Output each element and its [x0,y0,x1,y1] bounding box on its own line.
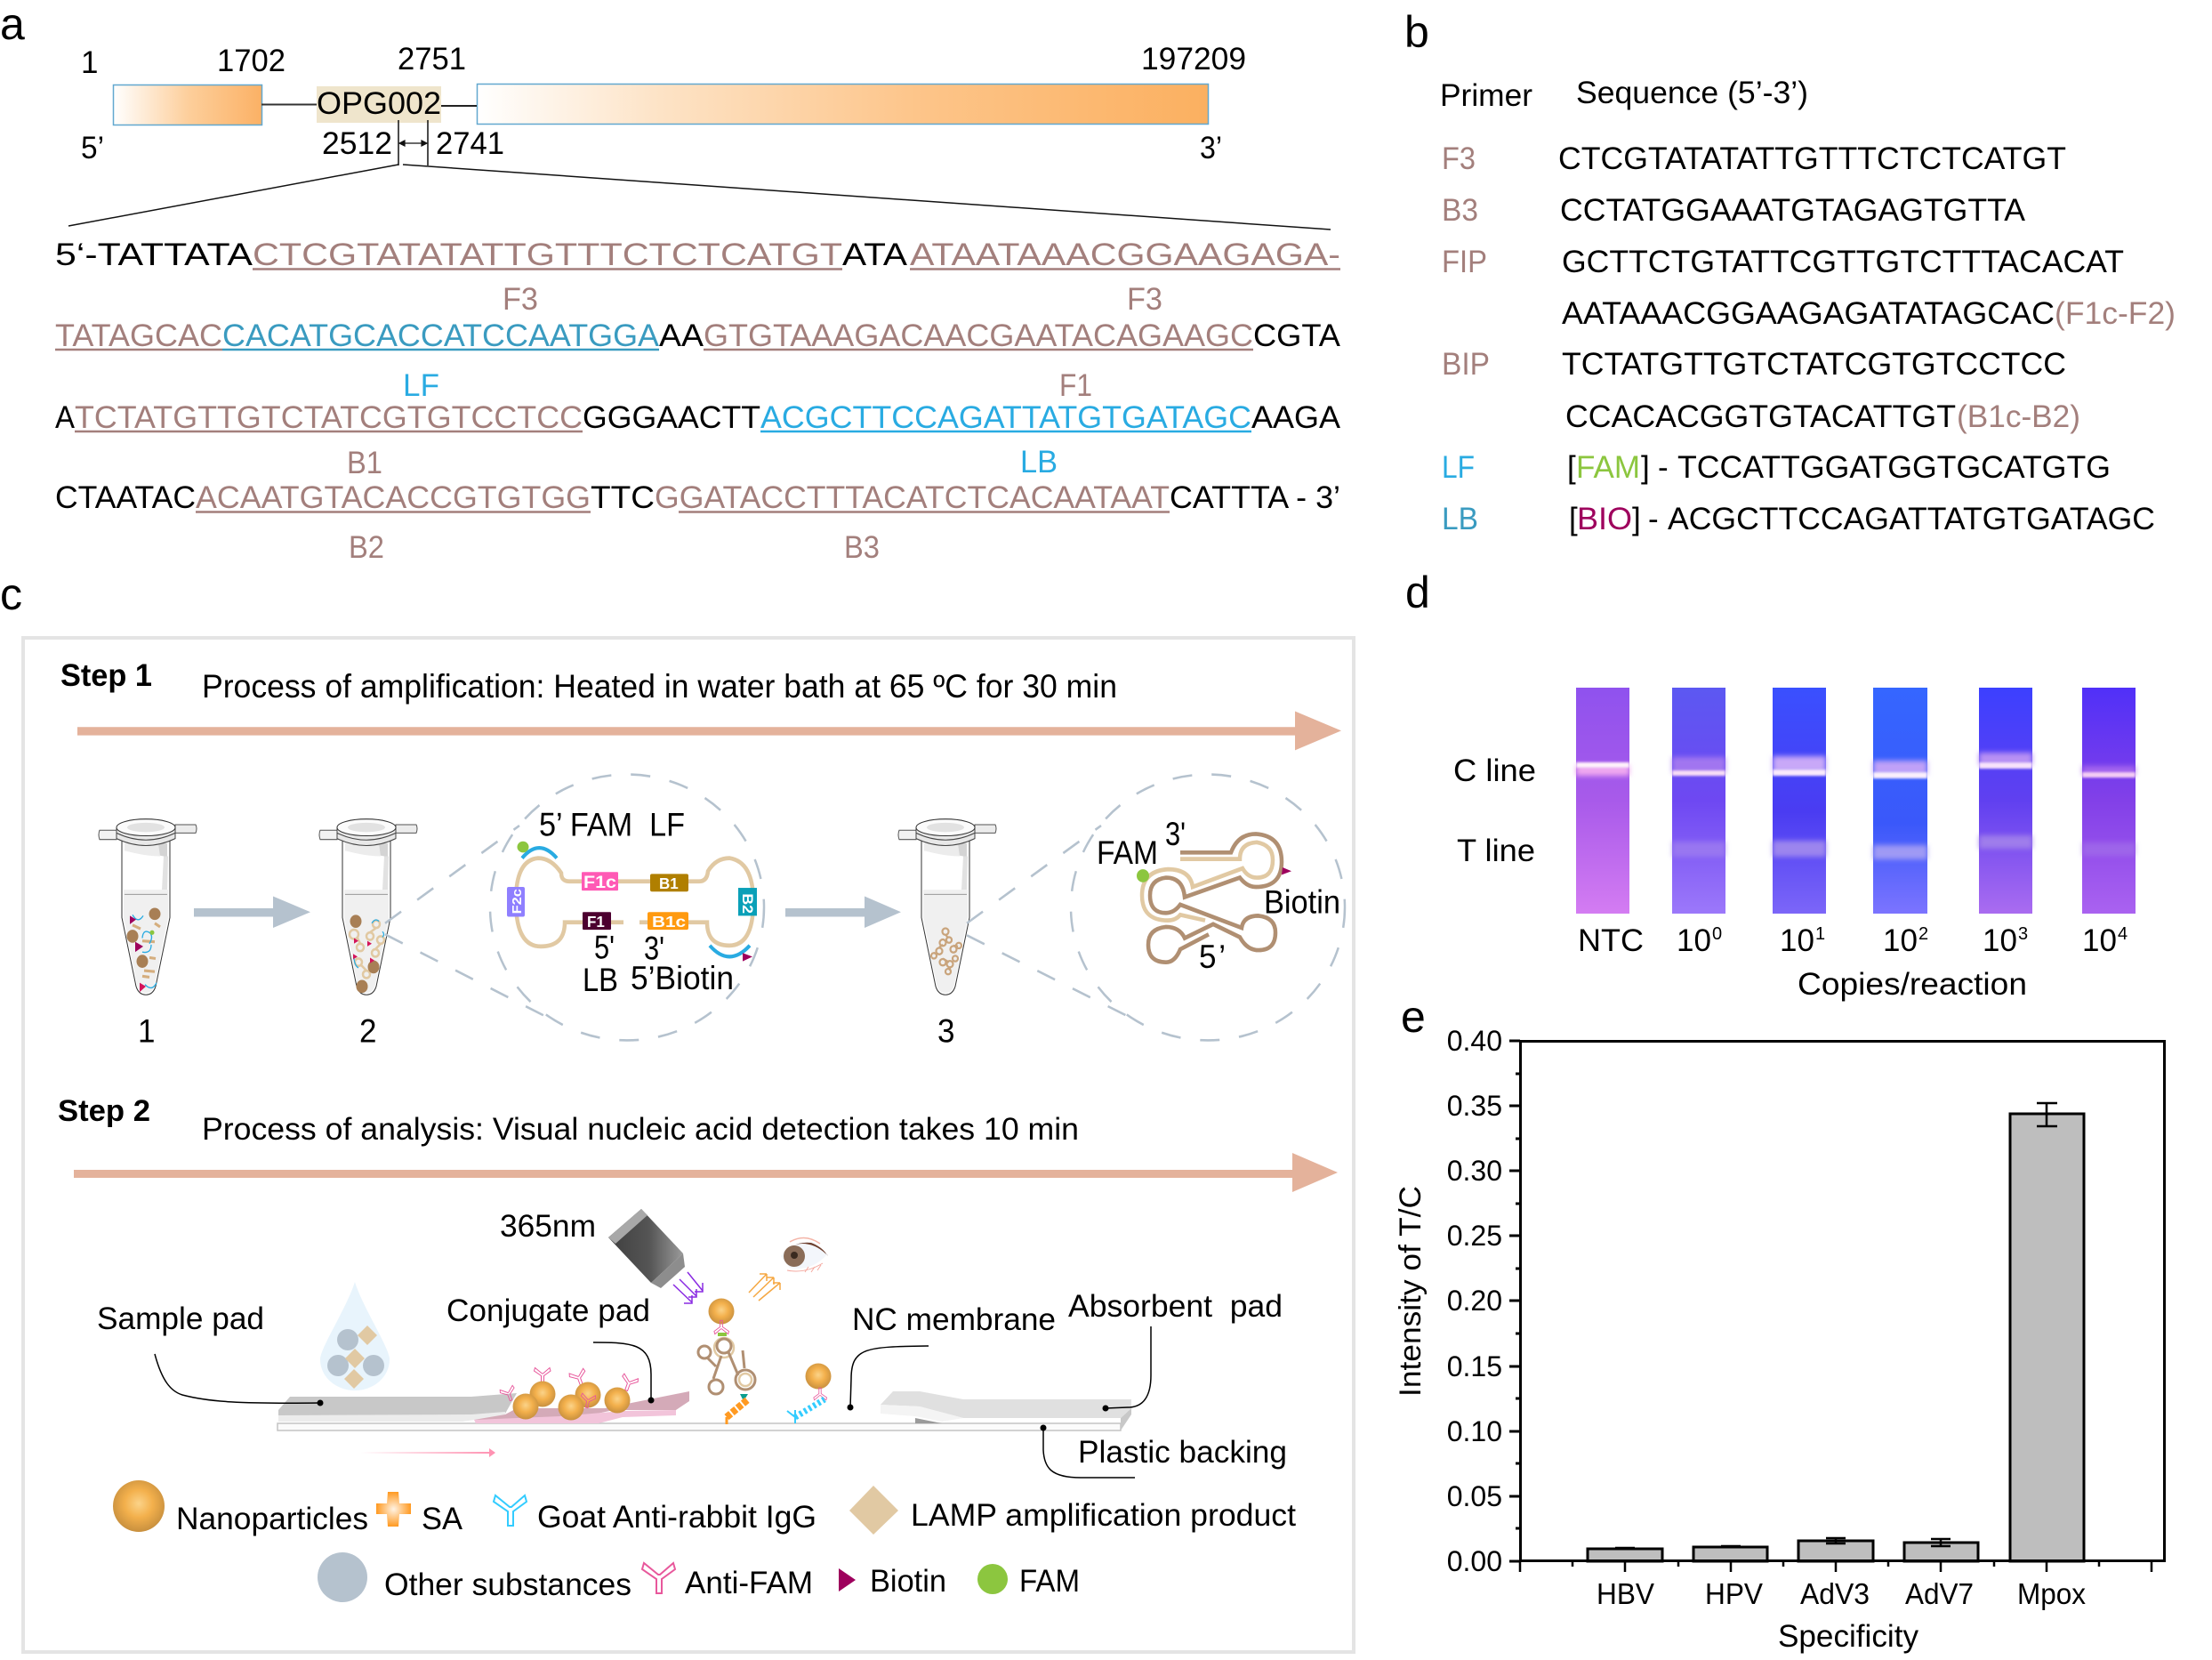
absorbent pad [881,1391,1131,1430]
tube 2 [319,819,417,995]
row BIP: CCACACGGTGTACATTGT [1565,399,1956,434]
row LF: TCCATTGGATGGTGCATGTG [1677,450,2111,485]
legend: other substances [318,1552,631,1602]
strip labels: 10 [2082,923,2117,958]
sample pad [278,1393,517,1422]
sequence line 4: ACAATGTACACCGTGTGG [196,480,591,515]
row LB: - [1648,502,1659,536]
tube 3 [898,819,996,995]
primer labels LF, F1: F1 [1059,368,1092,403]
sequence line 2: TATAGCAC [55,318,222,353]
row FIP: AATAAACGGAAGAGATATAGCAC [1562,296,2055,331]
panel a: genome map [68,42,1331,230]
number 3: 3 [937,1013,954,1050]
primer labels B2, B3 [349,530,880,565]
axis title: Copies/reaction [1798,967,2027,1002]
labels: 5’ [1199,939,1226,975]
y tick labels: 0.25 [1447,1220,1502,1252]
y tick labels [1447,1025,1502,1577]
F1c box: F1c [583,873,616,892]
gray arrow 2 [785,896,901,928]
F2c box [507,887,525,916]
legend: LAMP amplification product [849,1486,1296,1535]
primer labels LF, F1: LF [403,368,439,403]
panel b: primer table [1440,76,2176,536]
detection complex [698,1299,755,1424]
row LB: BIO [1577,502,1632,536]
primer labels B1, LB: B1 [347,446,382,480]
label: NC membrane [847,1302,1056,1411]
step 1 title: Step 1 [60,659,152,693]
bars [1588,1114,2084,1561]
row LB: ] [1632,502,1641,536]
FAM dot [518,842,528,852]
sequence line 1: ATA [842,238,908,272]
C line label: C line [1453,753,1536,788]
legend: FAM: FAM [1019,1564,1080,1599]
tube 1 [99,819,197,995]
panel label e: e [1401,992,1426,1042]
step 1 description: Process of amplification: Heated in water bath at 65 ºC for 30 min [202,668,1117,705]
labels: 5' [594,930,615,966]
strip labels: 2 [1918,924,1928,944]
strip labels: NTC [1578,923,1644,958]
sequence line 3: AAGA [1251,400,1341,435]
B2 box: B2 [739,893,757,914]
strip 10^2 [1873,688,1927,914]
sequence line 2: CGTA [1253,318,1341,353]
primer labels B1, LB: LB [1020,445,1058,479]
OPG002 gene: OPG002 [317,86,441,121]
axes frame [1521,1041,2165,1560]
panel c frame border [23,638,1354,1652]
position labels: 197209 [1141,42,1246,77]
B1c box [648,912,688,931]
legend: anti-FAM [642,1563,813,1600]
sequence line 2: GTGTAAAGACAACGAATACAGAAGC [704,318,1253,353]
row F3: F3 [1442,141,1476,176]
row LF: - [1658,450,1669,485]
primer labels B2, B3: B3 [844,530,880,565]
strip backing [278,1423,1121,1430]
B2 box [738,888,757,915]
label: plastic backing: Plastic backing [1078,1435,1287,1470]
panel label d: d [1405,568,1430,617]
step 1 arrow [77,711,1341,750]
genome segment 3' [477,84,1208,125]
sequence line 1: ATAATAAACGGAAGAGA- [910,238,1340,272]
row FIP: (F1c-F2) [2055,296,2176,331]
number 2: 2 [359,1013,376,1050]
legend: SA: SA [422,1502,463,1536]
labels: 5’ FAM LF [539,807,685,843]
gray arrow 1 [194,896,310,928]
row FIP [1442,245,2176,331]
legend: goat anti-rabbit IgG: Goat Anti-rabbit IgG [537,1500,816,1535]
labels: 3' [644,931,664,967]
sequence line 3 [55,400,1341,435]
biotin marker [743,953,752,962]
x category labels: Mpox [2017,1577,2086,1610]
genome segment 5' [114,85,261,125]
strip 10^3 [1979,688,2032,914]
primer labels LF, F1 [403,368,1092,403]
B1 box: B1 [659,874,679,892]
FAM dot [1137,869,1149,882]
label: sample pad [97,1301,324,1406]
labels [1097,816,1340,975]
y ticks [1509,1041,1520,1561]
primer labels B2, B3: B2 [349,530,384,565]
sequence line 3: A [55,400,76,435]
label: plastic backing [1041,1425,1287,1478]
strip labels [1578,923,2128,958]
number 1: 1 [138,1013,155,1050]
label: sample pad: Sample pad [97,1301,264,1336]
position labels: 1 [81,45,98,80]
row B3: B3 [1442,193,1478,228]
legend: nanoparticles [113,1480,368,1536]
sequence line 4: CTAATAC [55,480,196,515]
LAMP dumbbell structure [507,807,757,998]
strip labels: 10 [1780,923,1814,958]
position labels: 2512 [322,126,392,161]
panel label a: a [0,0,25,49]
labels: FAM [1097,834,1158,871]
biotin marker [1282,867,1291,874]
labels [539,807,734,998]
strip labels: 0 [1712,924,1722,944]
position labels: 5’ [81,131,104,165]
table header: Sequence (5’-3’) [1576,76,1808,110]
strip NTC [1576,688,1629,914]
primer labels F3 [503,282,1162,317]
step 2 description: Process of analysis: Visual nucleic acid detection takes 10 min [202,1112,1079,1147]
panel label c: c [0,569,22,619]
primer labels B1, LB [347,445,1058,480]
F1 box [583,912,611,931]
sequence line 1: 5‘-TATTATA [55,238,253,272]
sequence line 3: TCTATGTTGTCTATCGTGTCCTCC [75,400,583,435]
panel e: bar chart [1394,1025,2165,1654]
x category labels: AdV7 [1905,1577,1974,1610]
x axis title: Specificity [1778,1619,1918,1654]
strip labels: 10 [1983,923,2017,958]
y axis title: Intensity of T/C [1394,1186,1428,1397]
row LF: FAM [1576,450,1640,485]
sequence line 1 [55,238,1340,272]
sequence line 4: TTC [591,480,655,515]
primer LF arc [522,848,557,858]
zoom lines and dashed circle 2 [967,775,1345,1040]
strip 10^1 [1773,688,1826,914]
legend: biotin: Biotin [870,1564,946,1599]
x category labels: AdV3 [1800,1577,1870,1610]
eye [781,1237,828,1272]
label: absorbent pad: Absorbent pad [1068,1289,1283,1324]
strip 10^4 [2082,688,2136,914]
primer labels F3: F3 [503,282,538,317]
sequence line 2: CACATGCACCATCCAATGGA [222,318,660,353]
B1 box [650,874,688,892]
strip labels: 1 [1815,924,1825,944]
sequence line 3: ACGCTTCCAGATTATGTGATAGC [760,400,1251,435]
365nm label: 365nm [500,1209,596,1244]
strip 10^0 [1672,688,1725,914]
row BIP [1442,347,2080,434]
row LB: [ [1569,502,1578,536]
UV rays [673,1272,703,1303]
step 2 title: Step 2 [58,1094,150,1128]
position labels: 1702 [217,44,286,78]
legend: FAM [977,1564,1080,1599]
B1c box: B1c [652,913,686,931]
row LF: ] [1641,450,1650,485]
primer labels F3: F3 [1127,282,1162,317]
legend: SA [376,1492,463,1536]
sequence line 3: GGGAACTT [583,400,760,435]
table header [1440,76,1808,113]
position labels: 2741 [436,126,504,161]
step 1 content [60,659,1345,1050]
row LB: LB [1442,502,1478,536]
legend: LAMP amplification product: LAMP amplification product [911,1498,1296,1533]
position labels [81,42,1246,165]
error bars [1615,1103,2057,1549]
y tick labels: 0.20 [1447,1285,1502,1317]
y tick labels: 0.30 [1447,1155,1502,1187]
label: NC membrane: NC membrane [852,1302,1056,1337]
row FIP: FIP [1442,245,1487,279]
legend: other substances: Other substances [384,1567,631,1602]
zoom lines and dashed circle 1 [385,775,764,1040]
y tick labels: 0.10 [1447,1415,1502,1447]
row BIP: BIP [1442,347,1490,382]
legend: nanoparticles: Nanoparticles [176,1502,368,1536]
row F3: CTCGTATATATTGTTTCTCTCATGT [1558,141,2066,176]
label: absorbent pad [1068,1289,1283,1411]
primer LB arc [710,946,750,956]
position labels: 3’ [1200,131,1222,165]
row BIP: (B1c-B2) [1957,399,2080,434]
sequence line 4: GGATACCTTTACATCTCACAATAAT [655,480,1170,515]
F2c box: F2c [510,889,525,914]
labels: 5’Biotin [631,960,734,996]
labels: Biotin [1264,884,1340,920]
y tick labels: 0.15 [1447,1350,1502,1382]
row BIP: TCTATGTTGTCTATCGTGTCCTCC [1562,347,2066,382]
y tick labels: 0.05 [1447,1480,1502,1512]
x category labels: HPV [1705,1577,1763,1610]
strip labels: 3 [2018,924,2028,944]
row LF: LF [1442,450,1475,485]
UV lamp [500,1209,703,1303]
label: conjugate pad: Conjugate pad [446,1293,650,1328]
strip labels: 10 [1677,923,1711,958]
row B3: CCTATGGAAATGTAGAGTGTTA [1560,193,2026,228]
row FIP: GCTTCTGTATTCGTTGTCTTTACACAT [1562,245,2124,279]
strip labels: 10 [1883,923,1918,958]
position labels: 2751 [398,42,466,77]
table header: Primer [1440,78,1532,113]
y tick labels: 0.40 [1447,1025,1502,1057]
labels: 3' [1165,816,1186,852]
legend: anti-FAM: Anti-FAM [685,1566,813,1600]
sequence line 2: AA [659,318,704,353]
panel d: lateral flow strips [1453,688,2136,1002]
T line label: T line [1457,834,1535,868]
sequence line 4 [55,480,1340,515]
capture complex [787,1363,831,1423]
row LB: ACGCTTCCAGATTATGTGATAGC [1668,502,2155,536]
conjugate pad [474,1391,689,1423]
LAMP product structure [1097,816,1340,975]
panel label b: b [1404,7,1429,57]
flow arrow [360,1448,495,1457]
y tick labels: 0.00 [1447,1545,1502,1577]
row LB [1442,502,2155,536]
F1 box: F1 [587,913,605,931]
sequence line 1: CTCGTATATATTGTTTCTCTCATGT [253,238,842,272]
sequence line 2 [55,318,1341,353]
step 2 arrow [74,1153,1338,1192]
sequence line 4: CATTTA - 3’ [1170,480,1340,515]
fluorescence arrows [749,1274,780,1301]
label: conjugate pad [446,1293,655,1404]
x category labels [1597,1577,2086,1610]
labels: LB [583,962,618,998]
row LF: [ [1567,450,1576,485]
sample drop [320,1282,390,1390]
x category labels: HBV [1597,1577,1654,1610]
x ticks [1520,1561,2152,1572]
strip labels: 4 [2118,924,2128,944]
row LF [1442,450,2111,485]
nanoparticles on conjugate pad [499,1368,639,1420]
y tick labels: 0.35 [1447,1090,1502,1122]
